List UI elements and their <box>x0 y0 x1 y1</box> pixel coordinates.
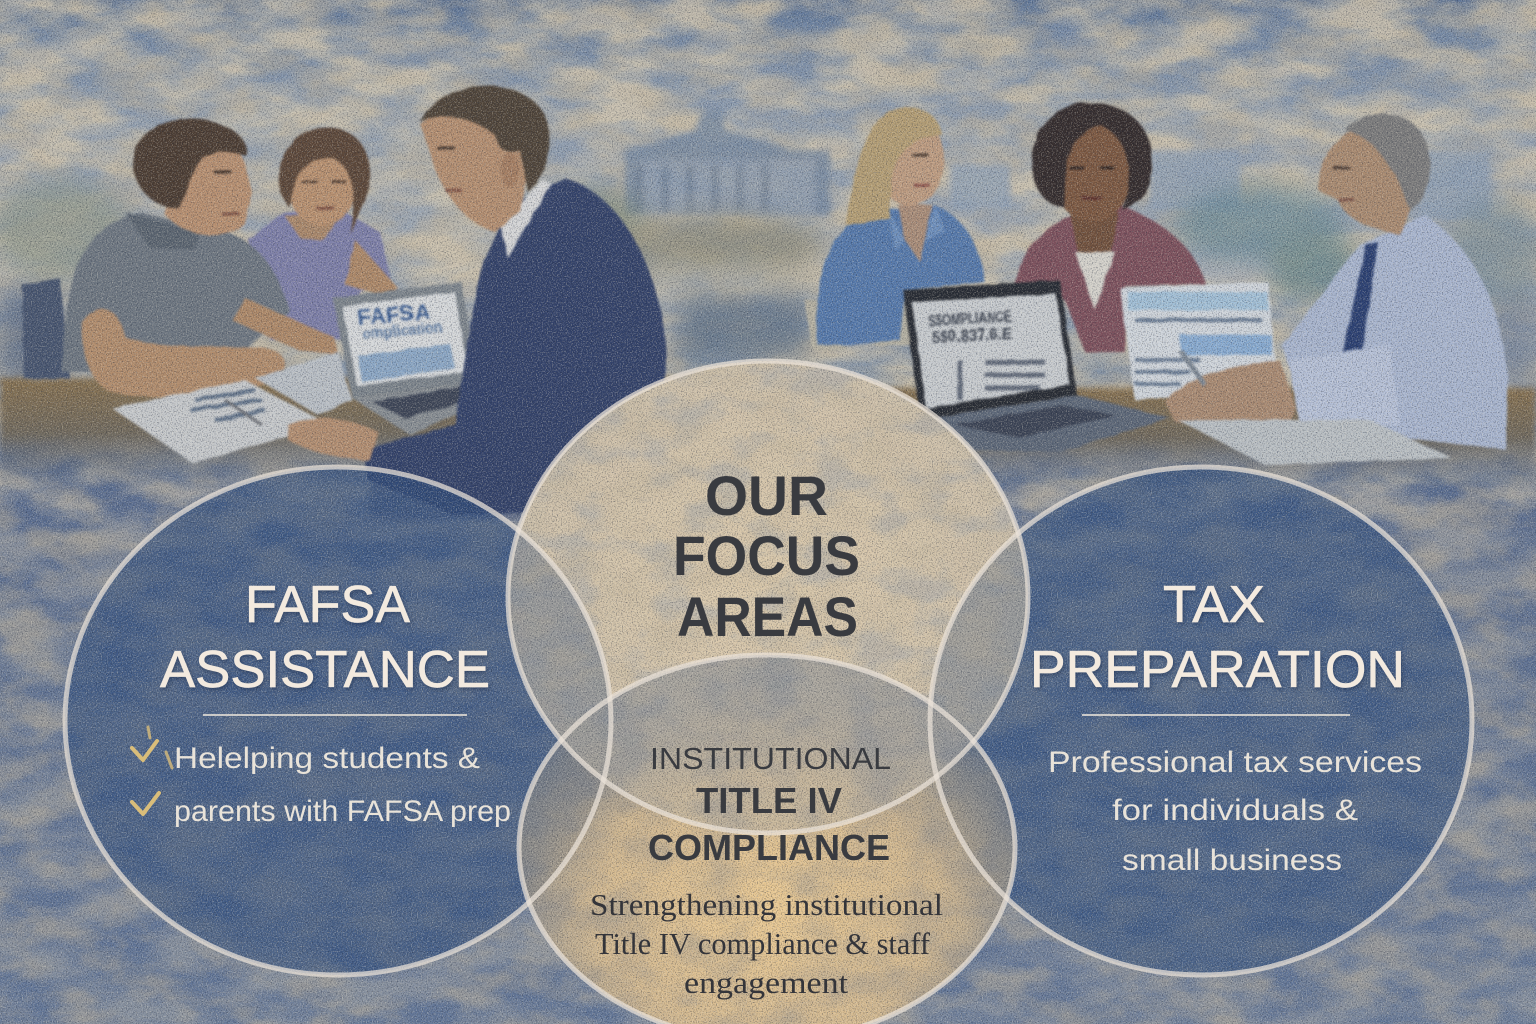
text: tax description: Professional tax services <box>1048 746 1422 779</box>
laptop: compliance screen: S$OMPLIANCE <box>927 309 1012 330</box>
tax preparer <box>1165 114 1508 465</box>
laptop: compliance screen: 5$0.837.6.E <box>931 324 1012 347</box>
heading: FAFSA assistance: FAFSA <box>245 576 410 634</box>
text: compliance description <box>590 887 943 1000</box>
title: our focus areas: FOCUS <box>673 524 860 587</box>
text: FAFSA description: parents with FAFSA prep <box>174 795 511 828</box>
campus landscape <box>0 110 1536 385</box>
heading: Title IV compliance: COMPLIANCE <box>648 827 890 868</box>
title: our focus areas: OUR <box>705 464 828 527</box>
cups <box>805 300 910 350</box>
tax form <box>1120 282 1278 400</box>
text: FAFSA description <box>174 742 511 828</box>
top circle texture <box>522 365 1013 698</box>
heading: tax preparation: TAX <box>1163 576 1265 634</box>
blond staff member <box>816 108 985 345</box>
student <box>62 119 338 397</box>
chair <box>22 278 70 378</box>
panel: institutional Title IV compliance <box>590 741 943 1000</box>
circle: our focus areas <box>508 361 1028 833</box>
documents <box>112 352 352 463</box>
panel: FAFSA assistance <box>132 576 511 828</box>
right group: staff and tax preparer <box>805 103 1508 465</box>
text: compliance description: Strengthening institutional <box>590 887 943 922</box>
title: our focus areas <box>673 464 860 648</box>
title: our focus areas: AREAS <box>677 585 858 648</box>
text: compliance description: Title IV compliance & staff <box>595 926 931 961</box>
heading: Title IV compliance: INSTITUTIONAL <box>650 741 891 776</box>
heading: tax preparation: PREPARATION <box>1030 641 1405 699</box>
laptop: FAFSA application: omplication <box>362 319 443 343</box>
heading: tax preparation <box>1030 576 1405 699</box>
laptop: FAFSA application <box>333 282 478 435</box>
venn diagram <box>65 355 1472 1024</box>
lens texture in focus circle <box>520 524 1019 728</box>
heading: Title IV compliance: TITLE IV <box>696 780 842 821</box>
left group: student, parent, advisor <box>62 86 667 515</box>
circle: institutional Title IV compliance <box>519 655 1015 1024</box>
circle outlines <box>65 361 1472 1024</box>
icon: check marks <box>132 727 172 814</box>
panel: tax preparation <box>1030 576 1422 877</box>
text: tax description: small business <box>1122 844 1342 877</box>
parent <box>248 127 398 340</box>
advisor <box>288 86 667 515</box>
heading: FAFSA assistance <box>160 576 490 699</box>
text: compliance description: engagement <box>684 965 848 1000</box>
compliance circle texture <box>523 658 999 1024</box>
laptop: compliance screen <box>903 280 1170 452</box>
text: tax description <box>1048 746 1422 877</box>
top circle base <box>508 361 1028 833</box>
overlap of centre circles <box>566 704 970 830</box>
laptop: FAFSA application: FAFSA <box>356 299 431 330</box>
heading: Title IV compliance <box>648 741 891 868</box>
text: FAFSA description: Helelping students & <box>174 742 480 775</box>
staff member in maroon <box>1012 103 1206 352</box>
illustrated scene: campus and advising meetings <box>0 86 1536 520</box>
heading: FAFSA assistance: ASSISTANCE <box>160 641 490 699</box>
circle: FAFSA assistance <box>65 467 611 975</box>
table <box>0 378 1536 520</box>
circle: tax preparation <box>930 467 1472 975</box>
text: tax description: for individuals & <box>1112 794 1358 827</box>
